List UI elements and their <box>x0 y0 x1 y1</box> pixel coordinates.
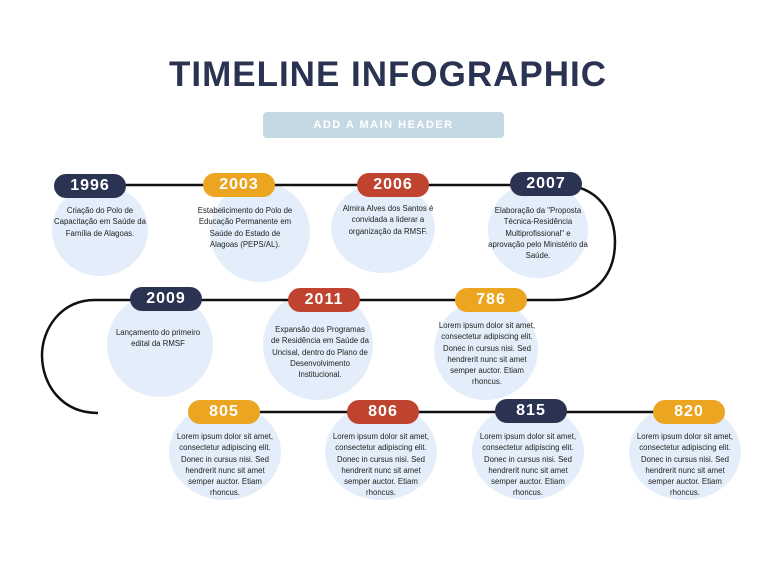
milestone 820: 820 <box>674 403 704 420</box>
milestone 2006 <box>357 173 429 197</box>
milestone 815 <box>495 399 567 423</box>
text 2009: Lançamento do primeiro edital da RMSF <box>116 328 200 348</box>
text 815: Lorem ipsum dolor sit amet, consectetur adipiscing elit. Donec in cursus nisi. Sed hendrerit nunc sit amet semper auctor. Etiam rhoncus. <box>480 432 576 497</box>
milestone 2007 <box>510 172 582 196</box>
milestone 805: 805 <box>209 403 239 420</box>
text 806: Lorem ipsum dolor sit amet, consectetur adipiscing elit. Donec in cursus nisi. Sed hendrerit nunc sit amet semper auctor. Etiam rhoncus. <box>333 432 429 497</box>
milestone 2011 <box>288 288 360 312</box>
milestone 1996: 1996 <box>70 177 110 194</box>
milestone 2006: 2006 <box>373 176 413 193</box>
milestone 805 <box>188 400 260 424</box>
milestone 820 <box>653 400 725 424</box>
milestone 2011: 2011 <box>305 291 343 308</box>
milestone 2007: 2007 <box>526 175 566 192</box>
milestone 2009 <box>130 287 202 311</box>
text 2011: Expansão dos Programas de Residência em Saúde da Uncisal, dentro do Plano de Desenvolvimento Institucional. <box>271 325 369 379</box>
milestone 2003: 2003 <box>219 176 259 193</box>
text 1996: Criação do Polo de Capacitação em Saúde da Família de Alagoas. <box>54 206 146 238</box>
milestone 2003 <box>203 173 275 197</box>
text 2006: Almira Alves dos Santos é convidada a liderar a organização da RMSF. <box>343 204 433 236</box>
text 820: Lorem ipsum dolor sit amet, consectetur adipiscing elit. Donec in cursus nisi. Sed hendrerit nunc sit amet semper auctor. Etiam rhoncus. <box>637 432 733 497</box>
title: TIMELINE INFOGRAPHIC <box>169 55 607 94</box>
text 786: Lorem ipsum dolor sit amet, consectetur adipiscing elit. Donec in cursus nisi. Sed hendrerit nunc sit amet semper auctor. Etiam rhoncus. <box>439 321 535 386</box>
milestone 2009: 2009 <box>146 290 186 307</box>
header pill <box>263 112 504 138</box>
header pill: ADD A MAIN HEADER <box>313 119 454 131</box>
milestone 786: 786 <box>476 291 506 308</box>
milestone 815: 815 <box>516 402 546 419</box>
milestone 786 <box>455 288 527 312</box>
milestone 806: 806 <box>368 403 398 420</box>
milestone 1996 <box>54 174 126 198</box>
text 2007: Elaboração da "Proposta Técnica-Residência Multiprofissional" e aprovação pelo Ministério da Saúde. <box>488 206 588 260</box>
text 2003: Estabelicimento do Polo de Educação Permanente em Saúde do Estado de Alagoas (PEPS/AL). <box>198 206 292 249</box>
milestone 806 <box>347 400 419 424</box>
text 805: Lorem ipsum dolor sit amet, consectetur adipiscing elit. Donec in cursus nisi. Sed hendrerit nunc sit amet semper auctor. Etiam rhoncus. <box>177 432 273 497</box>
